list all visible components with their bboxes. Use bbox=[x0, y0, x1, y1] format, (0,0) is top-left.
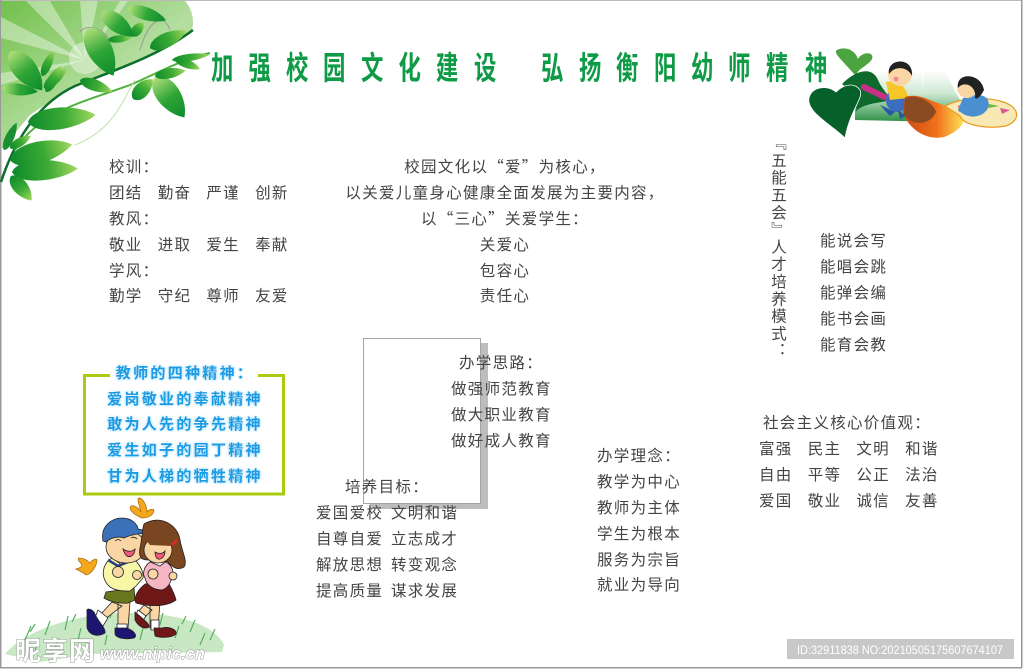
text: school mottos: 勤奋 bbox=[158, 181, 191, 203]
corner green burst background bbox=[1, 1, 193, 150]
icon: girl in pink bbox=[135, 520, 185, 637]
text: training goals: 解放思想 bbox=[316, 553, 383, 575]
text: school mottos: 友爱 bbox=[255, 284, 289, 306]
text: campus culture: 责任心 bbox=[480, 284, 530, 306]
text: training goals: 爱国爱校 bbox=[316, 501, 383, 523]
text: school mottos: 奉献 bbox=[255, 233, 289, 255]
text: training goals: 自尊自爱 bbox=[316, 527, 383, 549]
text: school mottos: 敬业 bbox=[109, 233, 143, 255]
text: school mottos: 爱生 bbox=[206, 233, 240, 255]
text: school-running philosophy: 办学理念： bbox=[597, 444, 681, 466]
text: socialist core values: 公正 bbox=[856, 463, 890, 485]
text: socialist core values: 法治 bbox=[905, 463, 939, 485]
text: school mottos: 教风： bbox=[109, 207, 159, 229]
text: school mottos: 尊师 bbox=[206, 284, 240, 306]
text: school-running philosophy: 就业为导向 bbox=[597, 573, 681, 595]
watermark logo bbox=[15, 631, 205, 668]
frame: four spirits bbox=[84, 376, 284, 494]
text: school mottos: 勤学 bbox=[109, 284, 143, 306]
text: four spirits of teachers: 爱岗敬业的奉献精神 bbox=[107, 388, 263, 409]
text: four spirits of teachers bbox=[106, 362, 263, 486]
text: school-running philosophy: 教学为中心 bbox=[597, 470, 681, 492]
text: socialist core values: 文明 bbox=[856, 437, 890, 459]
image id bar: ID:32911838 NO:20210505175607674107 bbox=[797, 643, 1003, 657]
text: campus culture: 校园文化以“爱”为核心， bbox=[404, 155, 606, 177]
text: five abilities list bbox=[820, 229, 887, 355]
text: four spirits of teachers: 教师的四种精神： bbox=[116, 362, 254, 383]
text: socialist core values: 民主 bbox=[808, 437, 841, 459]
text: socialist core values bbox=[759, 411, 939, 511]
text: school mottos: 进取 bbox=[158, 233, 191, 255]
text: training goals: 提高质量 bbox=[316, 579, 383, 601]
text: school-running ideas: 做好成人教育 bbox=[451, 429, 552, 451]
text: four spirits of teachers: 敢为人先的争先精神 bbox=[107, 413, 263, 434]
text: school-running philosophy bbox=[597, 444, 681, 595]
text: school-running philosophy: 服务为宗旨 bbox=[597, 548, 681, 570]
text: training goals: 文明和谐 bbox=[391, 501, 458, 523]
watermark logo: www.nipic.cn bbox=[100, 645, 205, 663]
text: five abilities list: 能书会画 bbox=[820, 307, 887, 329]
text: training goals bbox=[316, 475, 458, 601]
white card with grey shadow bbox=[364, 338, 488, 509]
text: four spirits of teachers: 甘为人梯的牺牲精神 bbox=[107, 465, 263, 486]
text: socialist core values: 自由 bbox=[759, 463, 793, 485]
text: training goals: 立志成才 bbox=[391, 527, 458, 549]
text: socialist core values: 社会主义核心价值观： bbox=[763, 411, 931, 433]
title: 加强校园文化建设 bbox=[211, 42, 496, 88]
text: campus culture: 包容心 bbox=[480, 259, 530, 281]
text: school mottos: 守纪 bbox=[158, 284, 191, 306]
text: school-running philosophy: 学生为根本 bbox=[597, 522, 681, 544]
watermark logo: 昵享网 bbox=[15, 631, 96, 668]
text: school-running ideas: 做大职业教育 bbox=[451, 403, 552, 425]
text: training goals: 谋求发展 bbox=[391, 579, 458, 601]
text: school mottos: 团结 bbox=[109, 181, 143, 203]
text: school mottos: 创新 bbox=[255, 181, 289, 203]
text: school-running philosophy: 教师为主体 bbox=[597, 496, 681, 518]
text: socialist core values: 爱国 bbox=[759, 489, 793, 511]
text: campus culture: 以关爱儿童身心健康全面发展为主要内容， bbox=[345, 181, 665, 203]
text: campus culture bbox=[345, 155, 665, 306]
text: training goals: 培养目标： bbox=[345, 475, 429, 497]
image id bar bbox=[787, 639, 1014, 659]
icon: green leafy vine bbox=[0, 2, 210, 205]
icon: orange butterflies bbox=[76, 498, 154, 575]
text: socialist core values: 敬业 bbox=[808, 489, 841, 511]
title bbox=[211, 42, 827, 88]
text: training goals: 转变观念 bbox=[391, 553, 458, 575]
text: socialist core values: 诚信 bbox=[856, 489, 890, 511]
text: campus culture: 以“三心”关爱学生： bbox=[421, 207, 589, 229]
title: 弘扬衡阳幼师精神 bbox=[541, 42, 827, 88]
text: socialist core values: 友善 bbox=[905, 489, 939, 511]
text: socialist core values: 富强 bbox=[759, 437, 793, 459]
text: campus culture: 关爱心 bbox=[480, 233, 530, 255]
text: five abilities list: 能说会写 bbox=[820, 229, 887, 251]
text: five abilities list: 能唱会跳 bbox=[820, 255, 887, 277]
text: five abilities vertical heading: 『五能五会』人才培养模式： bbox=[768, 135, 790, 360]
text: five abilities list: 能弹会编 bbox=[820, 281, 887, 303]
text: school mottos: 校训： bbox=[109, 155, 159, 177]
text: four spirits of teachers: 爱生如子的园丁精神 bbox=[107, 439, 263, 460]
text: school mottos bbox=[109, 155, 289, 306]
icon: heart leaves and painter kids bbox=[809, 48, 1017, 138]
text: socialist core values: 和谐 bbox=[905, 437, 939, 459]
text: school-running ideas: 做强师范教育 bbox=[451, 377, 552, 399]
text: five abilities list: 能育会教 bbox=[820, 333, 887, 355]
text: school mottos: 严谨 bbox=[206, 181, 240, 203]
icon: grass mound bbox=[5, 611, 224, 662]
text: socialist core values: 平等 bbox=[808, 463, 841, 485]
text: school-running ideas: 办学思路： bbox=[459, 351, 543, 373]
icon: boy with blue cap bbox=[87, 518, 148, 639]
text: school mottos: 学风： bbox=[109, 259, 159, 281]
text: school-running ideas bbox=[451, 351, 552, 451]
